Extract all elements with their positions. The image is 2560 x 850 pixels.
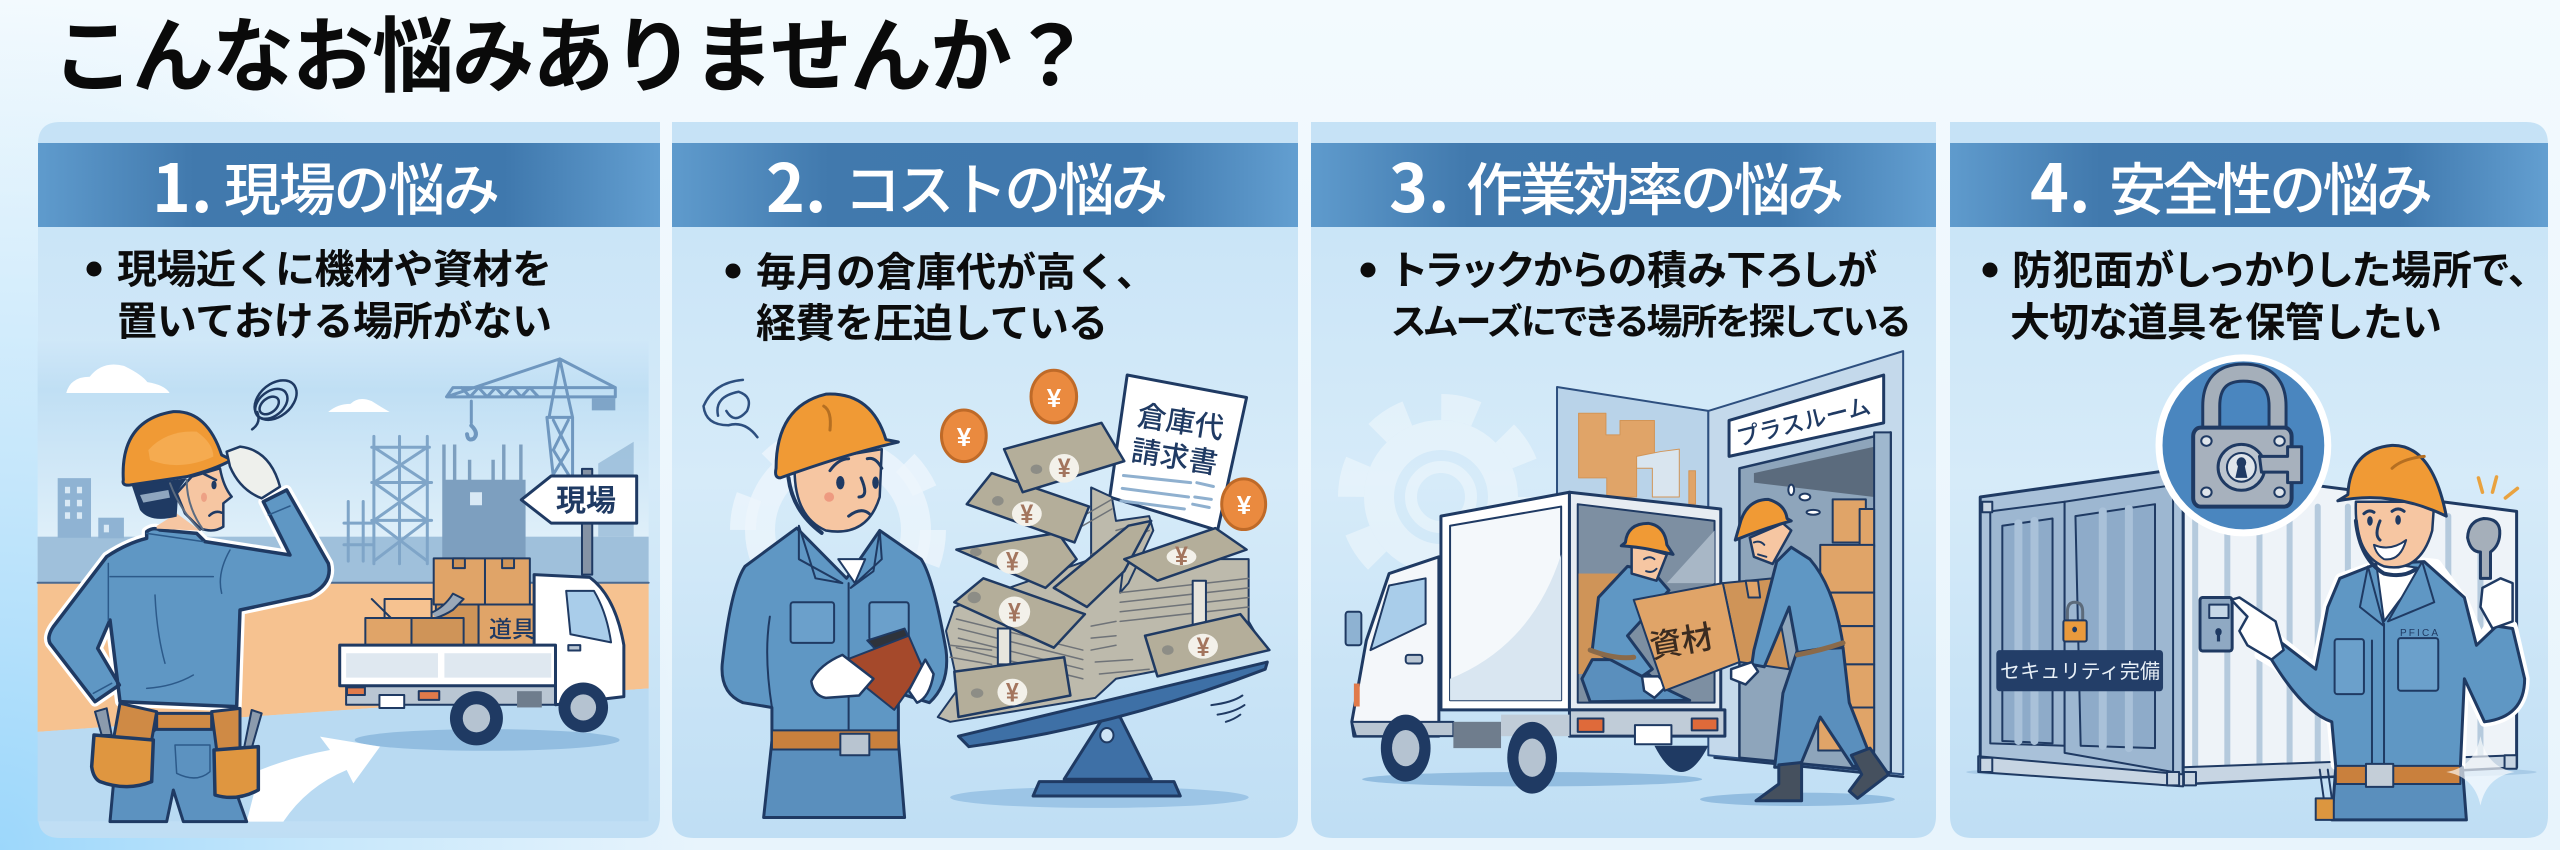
money pile: ¥ bbox=[1006, 678, 1019, 708]
sign post bbox=[582, 469, 592, 575]
panel: 2 cost worries bbox=[672, 122, 1298, 838]
money pile: ¥ bbox=[1008, 598, 1021, 628]
panel 3 heading: 作業効率の悩み bbox=[1466, 145, 1844, 227]
invoice label: 請求書 bbox=[1129, 434, 1220, 481]
sign label: 現場 bbox=[556, 476, 616, 520]
stored boxes outside bbox=[1579, 413, 1695, 504]
right pouch bbox=[214, 747, 258, 797]
motion lines bbox=[1211, 696, 1245, 722]
panel 2 heading: 2. bbox=[766, 136, 826, 232]
face bbox=[177, 468, 232, 530]
jacket name: PFICA bbox=[2400, 628, 2438, 639]
door keypad bbox=[2200, 597, 2232, 651]
ground shadow bbox=[1966, 765, 2537, 779]
delivery truck bbox=[1346, 492, 1725, 794]
yen symbols on coins: ¥ bbox=[957, 422, 972, 452]
panel 2 bullet text: 毎月の倉庫代が高く、 bbox=[756, 240, 1156, 298]
panel 4 background bbox=[1950, 122, 2548, 838]
tower crane bbox=[447, 359, 615, 477]
truck bbox=[340, 558, 624, 751]
jacket seams bbox=[93, 506, 290, 693]
right pouch strap bbox=[212, 708, 240, 750]
left pouch flap bbox=[113, 703, 157, 740]
panel 1 heading: 現場の悩み bbox=[224, 145, 500, 227]
panel 3 bullet text bbox=[1360, 238, 1910, 345]
panel 4 heading: 4. bbox=[2030, 136, 2090, 232]
panel 2 bullet text bbox=[726, 240, 1156, 349]
key sparkle bbox=[2478, 477, 2517, 498]
distant ground bbox=[38, 537, 649, 583]
panel: 1 site worries bbox=[38, 122, 660, 838]
container doors bbox=[1978, 468, 2196, 786]
carton labelled materials bbox=[1634, 578, 1789, 691]
building under construction bbox=[442, 445, 526, 564]
trousers bbox=[110, 728, 247, 822]
door opening bbox=[1739, 432, 1891, 772]
hair bbox=[132, 478, 187, 519]
jacket bbox=[49, 490, 329, 707]
panel 4 illustration: secure container and worker bbox=[1966, 358, 2537, 820]
clouds bbox=[66, 365, 390, 412]
scale base bbox=[1033, 717, 1180, 796]
padlock badge bbox=[2159, 358, 2328, 533]
invoice bbox=[1110, 375, 1247, 530]
panel 4 header bar bbox=[1950, 143, 2548, 227]
panel 4 bullet text bbox=[1982, 238, 2528, 348]
panel 2 bullet text: 経費を圧迫している bbox=[756, 291, 1108, 349]
carton label: 資材 bbox=[1646, 611, 1717, 668]
building left wall bbox=[1557, 387, 1708, 626]
panel 4 bullet text: 大切な道具を保管したい bbox=[2010, 290, 2442, 348]
panel 1 bullet text: 現場近くに機材や資材を bbox=[117, 237, 552, 295]
sand bbox=[38, 583, 649, 732]
jacket halo bbox=[49, 490, 329, 707]
worry swirl bbox=[250, 372, 302, 429]
sweat marks bbox=[1788, 485, 1820, 515]
sign board bbox=[1729, 375, 1884, 456]
panel 1 background bbox=[38, 122, 660, 838]
panel 3 bullet text: トラックからの積み下ろしが bbox=[1393, 238, 1877, 296]
helmet bbox=[123, 412, 232, 485]
invoice label bbox=[1129, 399, 1226, 481]
sign bbox=[521, 476, 637, 523]
background gear bbox=[743, 435, 933, 625]
box label: 道具 bbox=[489, 610, 535, 644]
small padlock on door bbox=[2063, 602, 2087, 641]
scale beam bbox=[958, 662, 1267, 747]
scaffold bbox=[344, 436, 432, 564]
cargo boxes bbox=[365, 558, 545, 648]
panel 3 illustration: truck unloading at storage bbox=[1346, 351, 1903, 806]
yen symbols on coins: ¥ bbox=[1237, 490, 1252, 520]
worker with wallet bbox=[722, 394, 947, 817]
panel 1 heading: 1. bbox=[152, 136, 212, 232]
neck bbox=[157, 513, 200, 531]
container side bbox=[2183, 468, 2517, 784]
ground bbox=[38, 688, 649, 821]
panel 3 bullet text: スムーズにできる場所を探している bbox=[1392, 293, 1910, 345]
panel 3 heading: 3. bbox=[1389, 136, 1449, 232]
back pocket bbox=[175, 745, 210, 778]
background gear bbox=[1351, 407, 1531, 587]
shadows bbox=[1715, 758, 1903, 777]
helmet highlight bbox=[148, 432, 213, 465]
distant buildings bbox=[58, 442, 634, 538]
money pile bbox=[938, 423, 1269, 722]
panel 3 header bar bbox=[1311, 143, 1936, 227]
worker with key bbox=[2231, 445, 2525, 820]
panel 2 illustration: money scale and worker bbox=[704, 370, 1269, 817]
worker in truck bbox=[1582, 523, 1690, 702]
panel 1 illustration: site and truck bbox=[38, 342, 649, 821]
money pile: ¥ bbox=[1006, 547, 1019, 577]
corner star bbox=[2446, 736, 2515, 806]
storage boxes bbox=[1818, 499, 1874, 751]
panel 1 bullet text bbox=[86, 237, 552, 347]
panel 3 background bbox=[1311, 122, 1936, 838]
white ground arrow bbox=[247, 737, 380, 822]
sky bbox=[38, 342, 649, 583]
panel: 3 efficiency worries bbox=[1311, 122, 1936, 838]
panel: 4 safety worries bbox=[1950, 122, 2548, 838]
tools in right pouch bbox=[220, 710, 262, 748]
helmet strap bbox=[170, 480, 203, 530]
panel 1 header bar bbox=[38, 143, 660, 227]
panel 4 bullet text: 防犯面がしっかりした場所で、 bbox=[2012, 238, 2528, 296]
facial features bbox=[201, 474, 222, 516]
panel 2 background bbox=[672, 122, 1298, 838]
security label plate bbox=[1996, 650, 2163, 691]
coins bbox=[941, 370, 1266, 530]
money pile: ¥ bbox=[1058, 453, 1071, 483]
left pouch bbox=[92, 735, 153, 787]
money pile: ¥ bbox=[1175, 541, 1188, 571]
panel 1 worker seen from behind bbox=[49, 412, 380, 822]
tools in left pouch bbox=[95, 708, 140, 738]
building right wall bbox=[1708, 351, 1903, 774]
yen symbols on coins: ¥ bbox=[1047, 383, 1062, 413]
money pile: ¥ bbox=[1020, 499, 1033, 529]
label: security complete: セキュリティ完備 bbox=[2000, 655, 2160, 684]
panel 1 bullet text: 置いておける場所がない bbox=[117, 289, 552, 347]
panel 2 header bar bbox=[672, 143, 1298, 227]
money pile: ¥ bbox=[1197, 632, 1210, 662]
belt bbox=[157, 713, 212, 729]
horizon line bbox=[38, 582, 649, 584]
worry swirl bbox=[704, 380, 757, 437]
yen symbols on coins bbox=[957, 383, 1252, 520]
storage sign label: プラスルーム bbox=[1732, 387, 1873, 453]
worker carrying carton bbox=[1731, 499, 1889, 801]
shadow bbox=[950, 787, 1249, 808]
panel 2 heading: コストの悩み bbox=[844, 145, 1168, 227]
helmet band bbox=[140, 490, 170, 503]
invoice label: 倉庫代 bbox=[1135, 399, 1226, 446]
panel 4 heading: 安全性の悩み bbox=[2109, 145, 2433, 227]
glove bbox=[227, 447, 280, 498]
